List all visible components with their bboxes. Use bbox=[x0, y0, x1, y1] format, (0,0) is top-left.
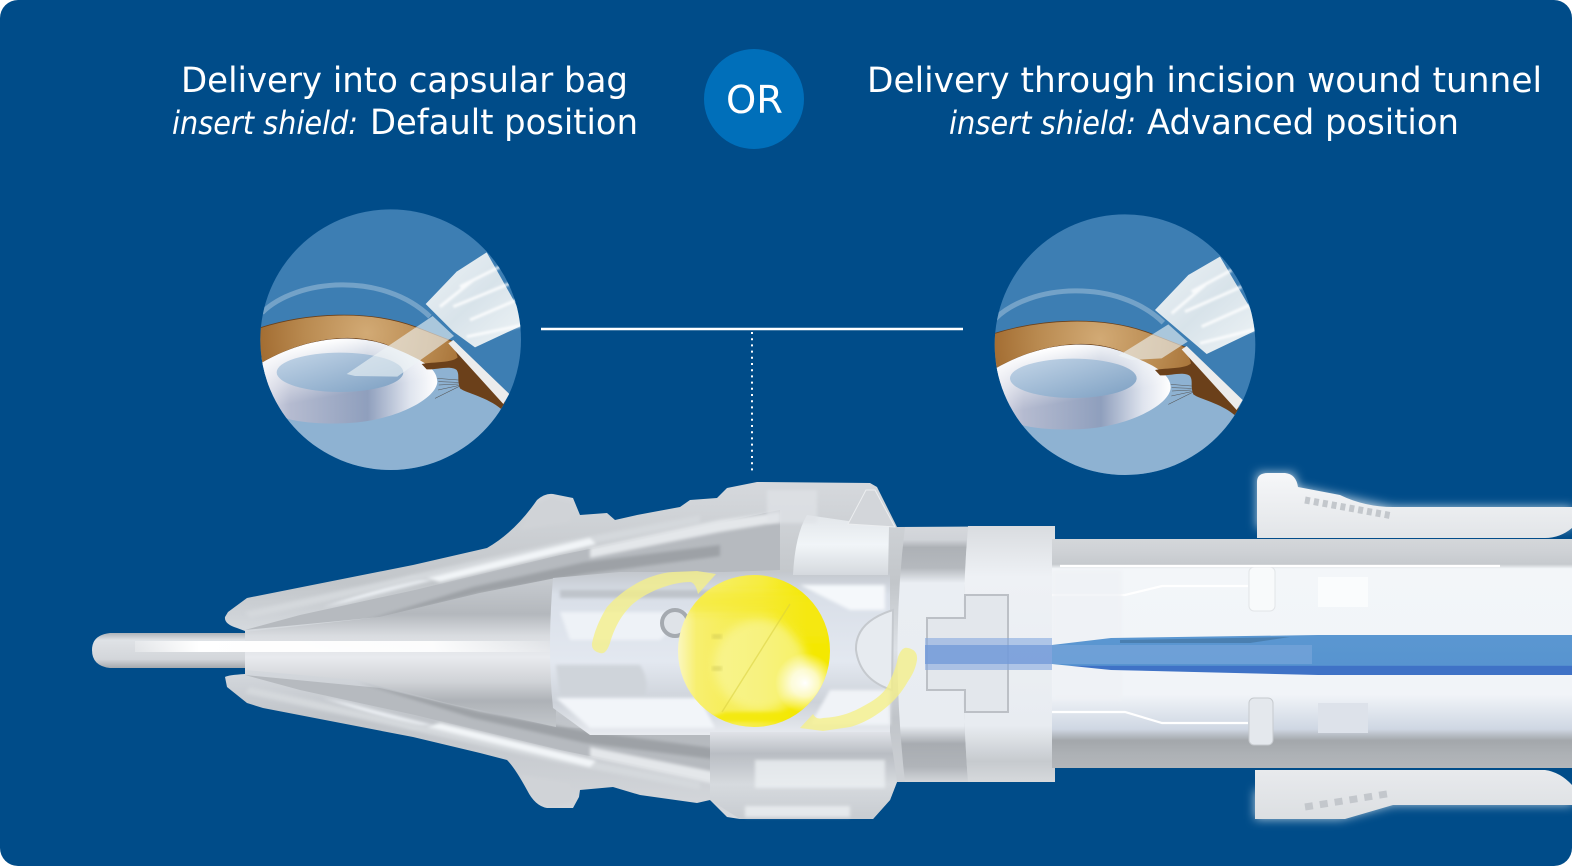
upper haptic bbox=[592, 571, 716, 653]
middle chamber bbox=[550, 572, 890, 735]
heading: capsular bag delivery: Default position bbox=[370, 103, 638, 143]
heading: incision wound tunnel delivery bbox=[867, 61, 1542, 143]
nozzle bbox=[426, 252, 527, 347]
intraocular lens bbox=[592, 571, 917, 731]
lower clip bbox=[1255, 770, 1572, 819]
illustration: injector device bbox=[92, 473, 1572, 819]
lower jaw detail bbox=[246, 675, 710, 789]
upper clip bbox=[1257, 473, 1572, 538]
insert shield retracted bbox=[1118, 324, 1188, 360]
heading: capsular bag delivery bbox=[172, 61, 638, 143]
main barrel bbox=[1052, 539, 1572, 768]
upper jaw detail bbox=[246, 513, 780, 630]
badge: OR: OR bbox=[726, 78, 783, 122]
insert shield extended bbox=[347, 316, 454, 377]
upper collar bbox=[793, 515, 889, 575]
heading: incision wound tunnel delivery: Advanced position bbox=[1147, 103, 1459, 143]
jaws and collars silhouette bbox=[225, 482, 1055, 819]
heading: incision wound tunnel delivery: insert shield: bbox=[949, 104, 1136, 142]
clip glow bbox=[1255, 473, 1572, 819]
blue plunger bbox=[1052, 635, 1572, 675]
connector line between eye details bbox=[541, 328, 963, 330]
injector ring outer bbox=[963, 526, 1055, 782]
central cone bbox=[245, 578, 556, 727]
heading: capsular bag delivery: Delivery into capsular bag bbox=[181, 61, 628, 101]
badge: OR bbox=[704, 49, 804, 149]
injector ring bbox=[898, 527, 968, 782]
injector tip needle bbox=[92, 633, 250, 668]
lower collar bbox=[710, 732, 897, 819]
illustration: eye detail default position bbox=[260, 209, 521, 470]
dotted leader to device bbox=[751, 332, 753, 471]
illustration: eye detail advanced position bbox=[994, 214, 1256, 475]
heading: capsular bag delivery: insert shield: bbox=[172, 104, 358, 142]
heading: incision wound tunnel delivery: Delivery through incision wound tunnel bbox=[867, 61, 1542, 101]
lower haptic bbox=[800, 648, 917, 731]
lens optic bbox=[678, 575, 830, 727]
tip highlight bbox=[135, 641, 560, 652]
nozzle bbox=[1155, 257, 1262, 354]
